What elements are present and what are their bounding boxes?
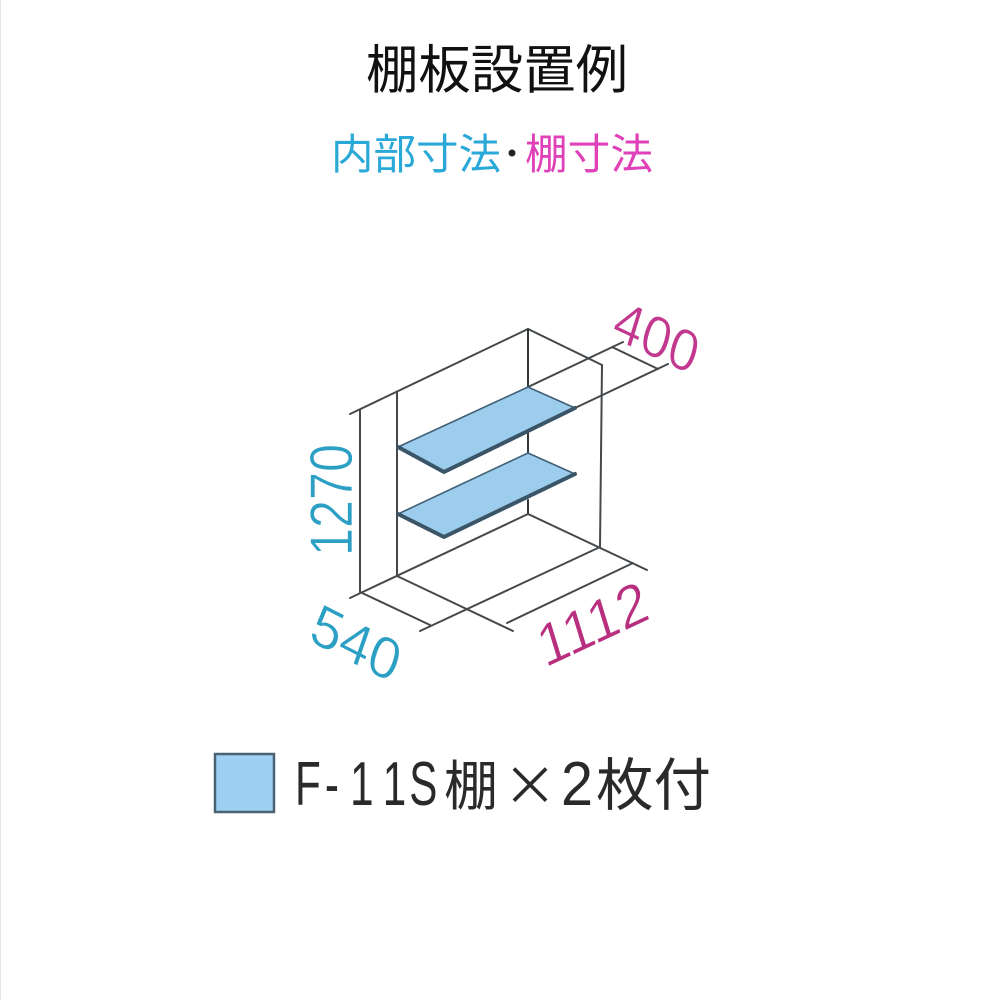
subtitle separator dot [508, 150, 516, 156]
legend label: × [503, 742, 557, 821]
subtitle part: shelf dimensions: 棚寸法 [525, 131, 653, 178]
legend label: 1 [350, 750, 374, 819]
lower shelf [398, 453, 575, 537]
subtitle part: interior dimensions: 内部寸法 [331, 131, 501, 178]
legend swatch [215, 754, 274, 812]
dimension: shelf width 1112: 1112 [530, 568, 656, 680]
legend label: 枚付 [596, 754, 711, 818]
dimension: shelf depth 400: 400 [606, 288, 707, 388]
legend label: 2 [561, 750, 593, 819]
upper shelf [398, 387, 575, 472]
storage frame wireframe [350, 329, 668, 631]
legend label: S [409, 750, 437, 819]
legend label [295, 742, 711, 821]
legend label: - [325, 750, 339, 819]
legend [215, 742, 711, 821]
dimension: interior height 1270: 1270 [298, 444, 365, 556]
legend label: F [295, 750, 321, 819]
dimension: interior depth 540: 540 [303, 592, 409, 696]
title: 棚板設置例 [366, 41, 628, 100]
subtitle: interior and shelf dimensions [331, 131, 653, 178]
shelf diagram [298, 288, 707, 696]
legend label: 1 [383, 750, 406, 819]
legend label: 棚 [444, 757, 498, 817]
